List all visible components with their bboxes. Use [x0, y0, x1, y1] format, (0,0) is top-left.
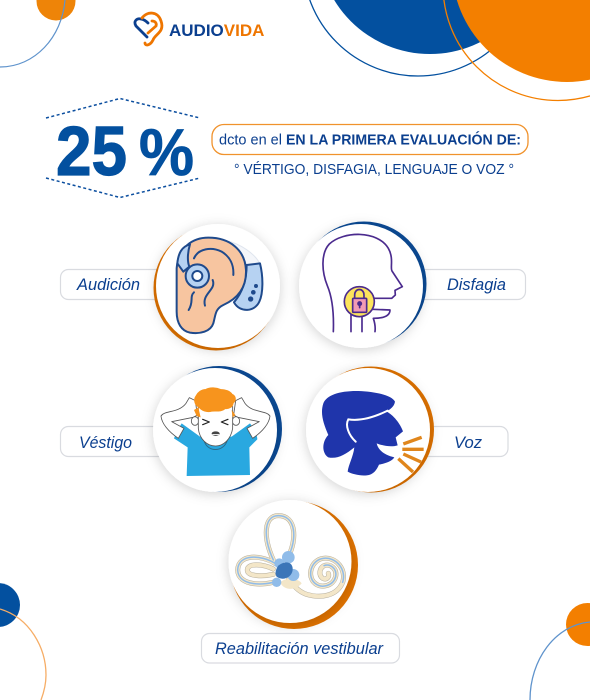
label: Véstigo: Véstigo [79, 433, 132, 452]
logo [135, 13, 264, 45]
label: Reabilitación vestibular [202, 634, 400, 663]
panel: Véstigo [60, 366, 282, 492]
icon: hearing aid ear [177, 238, 262, 333]
logo wordmark: AUDIO [169, 21, 224, 40]
circle [299, 222, 426, 348]
decoration: bottom right circle [530, 603, 590, 700]
icon: speaking head [322, 391, 424, 475]
circle [153, 366, 282, 492]
dashed frame [46, 98, 200, 198]
panel: Reabilitación vestibular [202, 500, 400, 663]
circle [228, 500, 358, 629]
label: Audición [60, 270, 170, 300]
discount number: 25 [56, 112, 127, 190]
headline pill: EN LA PRIMERA EVALUACIÓN DE: [286, 130, 521, 148]
label: Reabilitación vestibular: Reabilitación vestibular [215, 639, 384, 658]
headline pill: dcto en el [219, 132, 282, 148]
subheading: ° VÉRTIGO, DISFAGIA, LENGUAJE O VOZ ° [234, 161, 514, 178]
icon: inner ear labyrinth [238, 516, 344, 596]
circle [154, 224, 280, 350]
label: Disfagia [405, 270, 526, 300]
decoration: top left circle [0, 0, 76, 67]
label: Audición: Audición [76, 275, 140, 294]
discount badge [46, 98, 200, 198]
icon: head with locked throat [323, 234, 402, 332]
label: Véstigo [60, 426, 170, 456]
discount badge: % [139, 115, 194, 189]
panel: Audición [60, 224, 280, 350]
headline pill [212, 124, 528, 154]
label: Disfagia: Disfagia [447, 275, 506, 294]
decoration: top right circles [303, 0, 590, 100]
icon: heart ear [135, 13, 162, 45]
decoration: bottom left circle [0, 583, 46, 700]
panel: Disfagia [299, 222, 526, 348]
circle [306, 366, 434, 492]
panel: Voz [306, 366, 508, 492]
label: Voz [405, 426, 508, 456]
logo wordmark: VIDA [224, 21, 264, 40]
label: Voz: Voz [454, 433, 482, 452]
icon: boy holding head [161, 388, 270, 476]
